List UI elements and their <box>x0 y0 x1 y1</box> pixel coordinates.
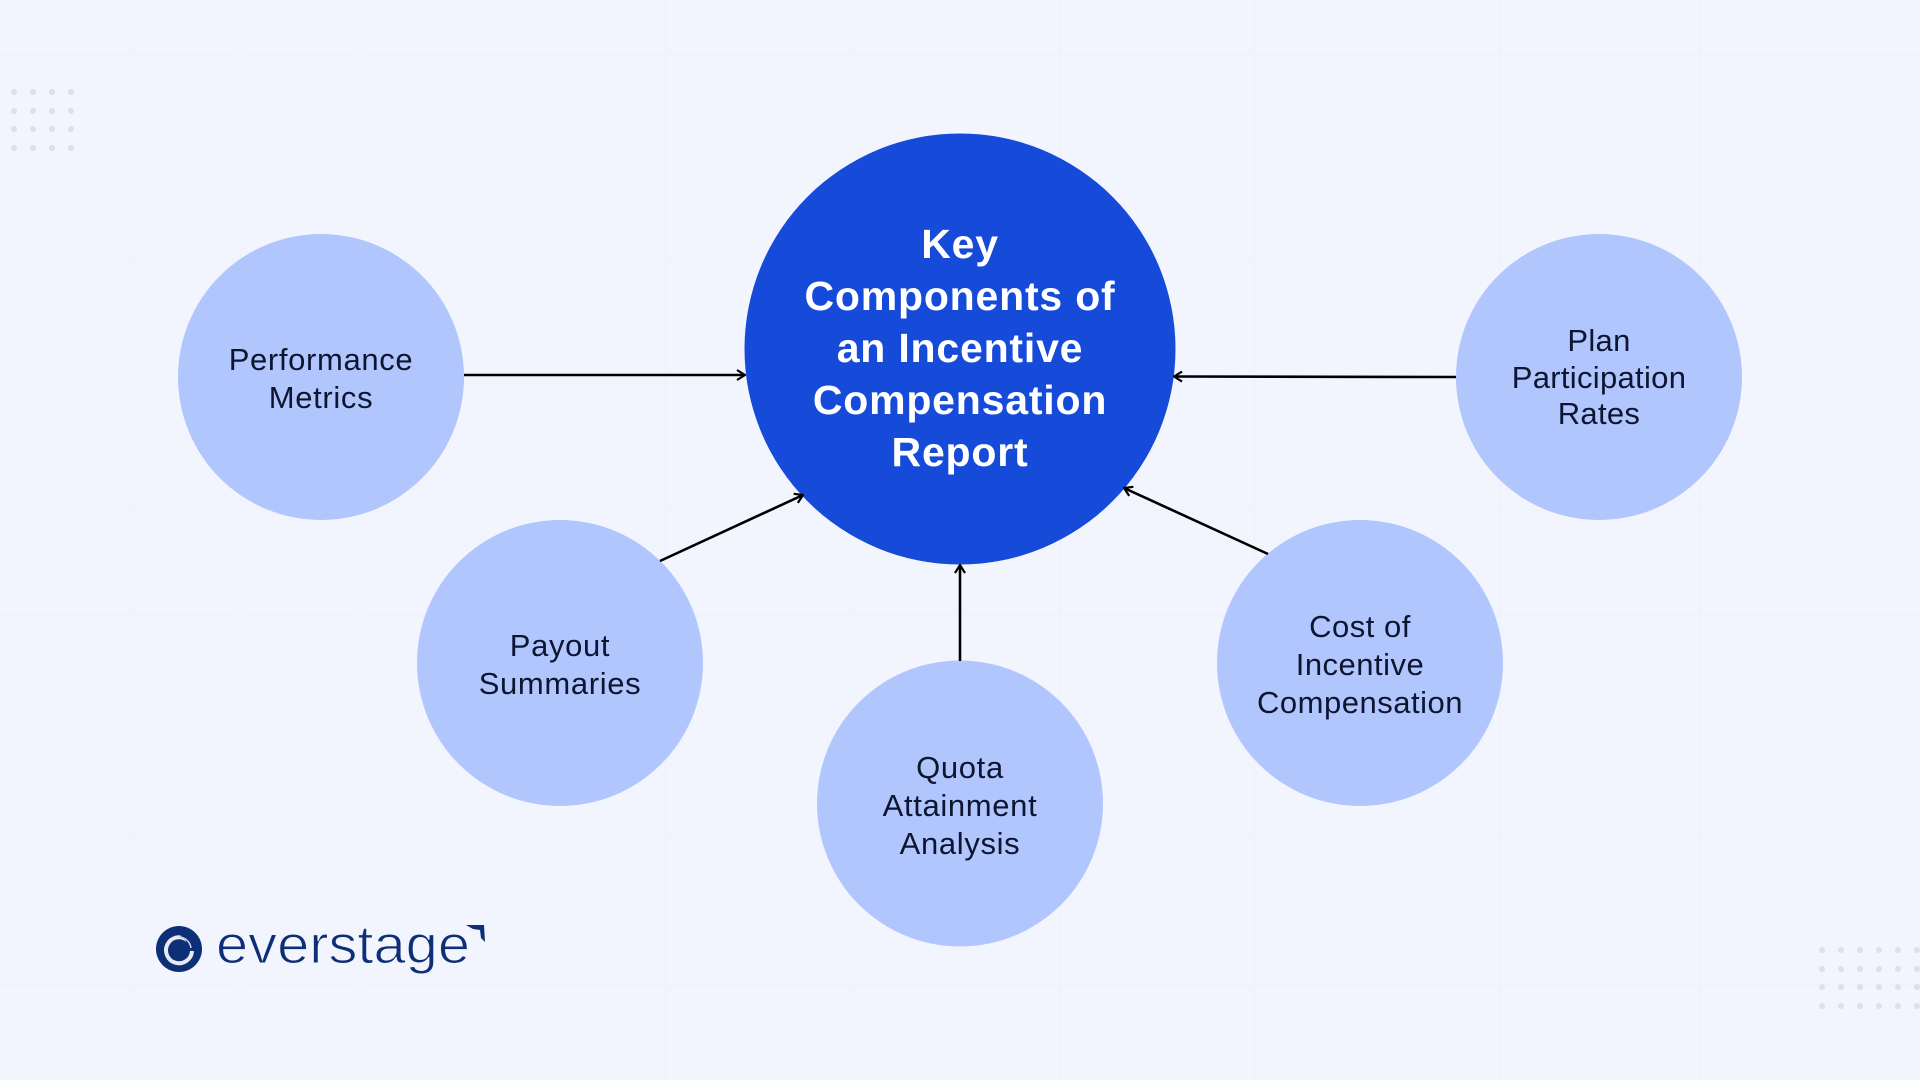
node: Cost of Incentive Compensation <box>1217 520 1503 806</box>
arrow: Payout Summaries to center <box>660 495 803 561</box>
node: Quota Attainment Analysis: Attainment <box>883 788 1037 823</box>
node: Cost of Incentive Compensation: Compensation <box>1257 685 1463 720</box>
node: Cost of Incentive Compensation: Incentive <box>1296 647 1424 682</box>
node: Plan Participation Rates: Rates <box>1558 396 1640 431</box>
node: Quota Attainment Analysis: Quota <box>916 750 1004 785</box>
arrow: Cost of Incentive Compensation to center <box>1124 488 1268 554</box>
node: Plan Participation Rates: Plan <box>1567 323 1631 358</box>
central circle: key components title <box>744 134 1176 564</box>
arrow: Plan Participation Rates to center <box>1174 375 1456 378</box>
title: an Incentive <box>837 325 1083 371</box>
node: Payout Summaries: Summaries <box>479 666 641 701</box>
arrow: Quota Attainment Analysis to center <box>959 565 961 661</box>
node: Plan Participation Rates: Participation <box>1512 360 1686 395</box>
node: Quota Attainment Analysis: Analysis <box>900 826 1020 861</box>
node: Payout Summaries <box>417 520 703 806</box>
arrow: Performance Metrics to center <box>464 374 745 376</box>
title: Components of <box>804 273 1116 319</box>
node: Performance Metrics <box>178 234 464 520</box>
decorative dots: bottom right <box>1819 947 1920 1009</box>
node: Payout Summaries: Payout <box>510 628 610 663</box>
decorative dots: top left <box>11 89 74 151</box>
node: Plan Participation Rates <box>1456 234 1742 520</box>
icon: logo mark <box>156 926 202 972</box>
title: Compensation <box>813 377 1107 423</box>
node: Performance Metrics: Performance <box>229 342 413 377</box>
node: Quota Attainment Analysis <box>817 660 1103 946</box>
node: Cost of Incentive Compensation: Cost of <box>1309 609 1411 644</box>
wordmark: everstage <box>216 915 470 975</box>
title: Key <box>921 221 999 267</box>
node: Performance Metrics: Metrics <box>269 380 373 415</box>
icon: logo corner mark <box>466 925 485 942</box>
title: Report <box>892 429 1028 475</box>
logo: everstage <box>156 915 485 975</box>
